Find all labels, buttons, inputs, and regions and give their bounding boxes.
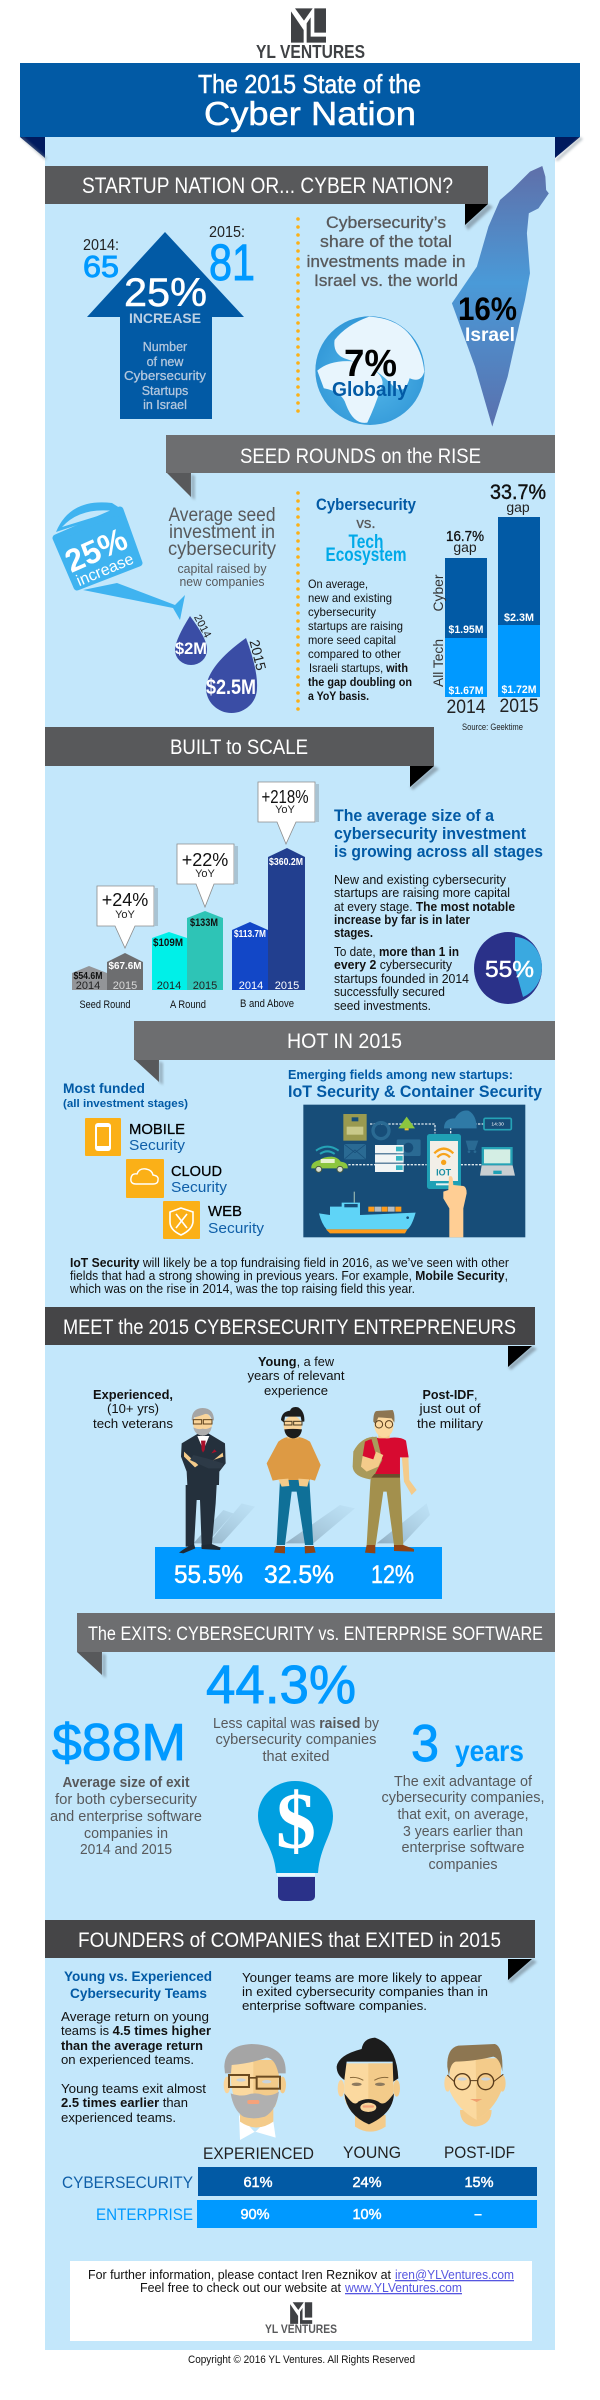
stat: 3 years advantage: enterprise software xyxy=(402,1839,524,1856)
chart: seed round gap bars: 33.7% xyxy=(490,481,546,504)
bars: B and above xyxy=(232,848,305,992)
chart: seed round gap bars: 16.7% xyxy=(446,528,484,545)
stat: 44.3 percent less capital: that exited xyxy=(262,1748,330,1765)
heading: hot in 2015: HOT IN 2015 xyxy=(287,1030,402,1053)
text block: young vs experienced: Cybersecurity Teams xyxy=(70,1985,207,2001)
text block: younger teams: in exited cybersecurity companies than in xyxy=(242,1984,488,1999)
text block: average size growth: New and existing cybersecurity xyxy=(334,872,506,887)
chart: startup count arrow: INCREASE xyxy=(129,310,201,326)
icon: dollar light bulb: $ xyxy=(276,1778,316,1866)
text block: cyber vs tech: compared to other xyxy=(308,647,401,661)
text block: cyber vs tech: Ecosystem xyxy=(326,545,406,566)
chart: seed round gap bars: Cyber xyxy=(430,574,446,612)
chart: startup count arrow: 81 xyxy=(209,234,255,291)
bars: seed round: $54.6M xyxy=(74,971,102,982)
callout: plus 22 percent xyxy=(177,844,238,907)
text block: cybersecurity share: share of the total xyxy=(320,232,452,251)
text: entrepreneur descriptions: (10+ yrs) xyxy=(107,1401,159,1416)
chart: startup count arrow: 2014: xyxy=(83,237,119,254)
bars: A round: $133M xyxy=(190,917,218,929)
callout: plus 24 percent xyxy=(97,886,158,948)
text block: average seed: capital raised by xyxy=(178,561,267,576)
stat: 3 years advantage: 3 years earlier than xyxy=(403,1823,523,1840)
chart: startup count arrow: of new xyxy=(147,355,184,369)
text block: average size growth: increase by far is in later xyxy=(334,912,470,927)
heading: meet the entrepreneurs: MEET the 2015 CYBERSECURITY ENTREPRENEURS xyxy=(63,1316,516,1339)
panel: light blue page background xyxy=(45,137,555,2350)
text block: cyber vs tech: a YoY basis. xyxy=(308,689,369,703)
icon: globe with 7 percent: 7% xyxy=(344,343,397,385)
text: emerging fields xyxy=(288,1067,542,1101)
icon: web shield xyxy=(163,1201,200,1239)
bars: A round xyxy=(152,911,223,992)
bars: A round: 2014 xyxy=(157,980,181,992)
text block: cyber vs tech: cybersecurity xyxy=(308,605,376,619)
table: founder share by type: CYBERSECURITY xyxy=(62,2174,193,2192)
heading: meet the entrepreneurs xyxy=(45,1307,537,1370)
list: most funded security: Most funded xyxy=(63,1080,145,1096)
table: founder share by type: POST-IDF xyxy=(444,2143,515,2162)
callout: plus 22 percent: YoY xyxy=(195,868,216,880)
logo: YL Ventures header xyxy=(256,8,365,62)
table: founder share by type: 90% xyxy=(240,2207,270,2223)
text block: younger teams: enterprise software companies. xyxy=(242,1998,427,2013)
bars: B and above: 2014 xyxy=(239,980,263,992)
text block: cyber vs tech xyxy=(308,495,416,703)
table: founder share by type: 24% xyxy=(352,2175,382,2191)
text block: IoT security paragraph: fields that had a strong showing in previous years. For example, Mobile Security, xyxy=(70,1269,508,1283)
stat: 3 years advantage: 3 xyxy=(411,1715,439,1773)
chart: startup count arrow: 2015: xyxy=(209,224,245,241)
stat: 3 years advantage: that exit, on average, xyxy=(398,1806,528,1823)
heading: founders xyxy=(45,1920,537,1983)
icon: drops 2014 and 2015: $2M xyxy=(175,639,207,658)
text: entrepreneur descriptions: Experienced, xyxy=(93,1387,173,1402)
chart: investment size by stage: A Round xyxy=(170,999,206,1011)
chart: seed round gap bars: $1.72M xyxy=(502,684,536,696)
stat: 44.3 percent less capital xyxy=(206,1655,379,1765)
heading: seed rounds xyxy=(166,435,555,500)
text block: young vs experienced: teams is 4.5 times higher xyxy=(61,2023,211,2038)
title banner: The 2015 State of the xyxy=(198,69,421,99)
callout: plus 24 percent: +24% xyxy=(102,890,148,910)
stat: 3 years advantage: years xyxy=(455,1735,524,1768)
table: founder share by type: ENTERPRISE xyxy=(96,2206,193,2224)
bars: seed round: 2014 xyxy=(76,980,100,992)
text: entrepreneur descriptions: Post-IDF, xyxy=(422,1387,478,1402)
bars: B and above: 2015 xyxy=(275,980,299,992)
list: most funded security: Security xyxy=(129,1137,186,1154)
text block: younger teams xyxy=(242,1970,488,2013)
figure: post IDF man xyxy=(353,1410,417,1553)
text block: young vs experienced: on experienced teams. xyxy=(61,2052,194,2067)
text block: average seed: investment in xyxy=(169,522,275,543)
footer: copyright: Copyright © 2016 YL Ventures. All Rights Reserved xyxy=(188,2354,415,2366)
chart: startup count arrow: in Israel xyxy=(143,398,187,412)
label: 16 percent Israel: Israel xyxy=(465,325,515,346)
logo: YL Ventures footer: YL VENTURES xyxy=(265,2322,337,2336)
text block: cybersecurity share xyxy=(306,213,466,290)
text block: average size growth xyxy=(334,806,543,1013)
bars: A round: 2015 xyxy=(193,980,217,992)
callout: plus 24 percent: YoY xyxy=(115,909,136,921)
shadows xyxy=(193,1503,430,1543)
text block: cyber vs tech: the gap doubling on xyxy=(308,675,412,689)
list: most funded security: Security xyxy=(208,1220,265,1237)
bars: A round: $109M xyxy=(153,937,183,949)
text: entrepreneur descriptions xyxy=(93,1354,484,1431)
text: emerging fields: Emerging fields among new startups: xyxy=(288,1067,513,1082)
icon: dollar light bulb xyxy=(258,1778,333,1901)
text block: cyber vs tech: Israeli startups, with xyxy=(309,661,408,675)
stat: 88M average exit xyxy=(50,1714,202,1858)
heading: built to scale xyxy=(45,727,439,790)
list: most funded security: (all investment stages) xyxy=(63,1098,188,1110)
text block: cyber vs tech: new and existing xyxy=(308,591,392,605)
icon: 25 percent increase tag: increase xyxy=(74,551,136,590)
text block: cybersecurity share: investments made in xyxy=(306,252,466,271)
label: 16 percent Israel xyxy=(458,291,517,346)
stat: 3 years advantage: The exit advantage of xyxy=(394,1773,533,1790)
table: founder share by type: YOUNG xyxy=(343,2143,401,2162)
table: founder share by type xyxy=(62,2143,537,2228)
heading: startup nation xyxy=(45,166,493,230)
figure: platform with percentages: 32.5% xyxy=(264,1561,334,1589)
chart: seed round gap bars xyxy=(430,481,546,732)
logo: YL Ventures header: YL VENTURES xyxy=(256,42,365,62)
bars: seed round: 2015 xyxy=(113,980,137,992)
icon: drops 2014 and 2015: 2015 xyxy=(246,638,270,672)
illustration: internet of things: IOT xyxy=(436,1168,452,1178)
chart: investment size by stage: B and Above xyxy=(240,998,294,1010)
chart: seed round gap bars: $1.95M xyxy=(448,624,484,636)
text block: cyber vs tech: Tech xyxy=(348,532,384,553)
text: entrepreneur descriptions: Young, a few xyxy=(258,1354,335,1369)
chart: seed round gap bars: 2014 xyxy=(446,697,486,718)
face: young xyxy=(337,2038,400,2132)
text block: IoT security paragraph xyxy=(69,1256,509,1296)
text block: cyber vs tech: vs. xyxy=(356,515,376,532)
chart: seed round gap bars: gap xyxy=(453,539,477,555)
stat: 88M average exit: Average size of exit xyxy=(62,1774,190,1791)
icon: drops 2014 and 2015: $2.5M xyxy=(206,676,256,699)
figure: experienced man xyxy=(179,1408,226,1553)
text block: young vs experienced: 2.5 times earlier than xyxy=(61,2095,188,2110)
table: founder share by type: 15% xyxy=(464,2175,494,2191)
text: entrepreneur descriptions: tech veterans xyxy=(93,1416,174,1431)
chart: startup count arrow: Cybersecurity xyxy=(124,369,207,383)
text block: cybersecurity share: Israel vs. the world xyxy=(314,271,458,290)
icon: drops 2014 and 2015: 2014 xyxy=(191,613,213,640)
panel: contact box: www.YLVentures.com xyxy=(344,2280,462,2295)
text: entrepreneur descriptions: years of relevant xyxy=(248,1368,345,1383)
text block: young vs experienced xyxy=(61,1968,212,2125)
icon: 25 percent increase tag xyxy=(56,502,185,620)
text block: average size growth: To date, more than 1 in xyxy=(334,944,459,959)
text block: cyber vs tech: On average, xyxy=(308,577,368,591)
text block: cyber vs tech: more seed capital xyxy=(308,633,396,647)
text block: average size growth: The average size of a xyxy=(334,806,495,825)
text block: cybersecurity share: Cybersecurity’s xyxy=(326,213,446,232)
figure: platform with percentages: 55.5% xyxy=(174,1561,243,1589)
text block: average size growth: startups founded in 2014 xyxy=(334,971,469,986)
icon: globe with 7 percent xyxy=(315,316,425,425)
chart: seed round gap bars: All Tech xyxy=(430,639,446,687)
chart: seed round gap bars: Source: Geektime xyxy=(462,722,523,732)
text block: average seed: Average seed xyxy=(168,505,276,526)
illustration: founder faces xyxy=(224,2038,506,2140)
logo: YL Ventures footer xyxy=(265,2302,337,2336)
text block: younger teams: Younger teams are more likely to appear xyxy=(242,1970,483,1985)
list: most funded security xyxy=(63,1080,265,1239)
stat: 88M average exit: 2014 and 2015 xyxy=(80,1841,172,1858)
chart: startup count arrow: Number xyxy=(143,340,187,354)
chart: seed round gap bars: $2.3M xyxy=(504,612,534,624)
text block: average size growth: is growing across all stages xyxy=(334,842,543,861)
text block: young vs experienced: than the average return xyxy=(61,2038,203,2053)
text block: cyber vs tech: startups are raising xyxy=(308,619,403,633)
table: founder share by type: 10% xyxy=(352,2207,382,2223)
text block: young vs experienced: Young vs. Experienced xyxy=(64,1968,212,1984)
bars: seed round xyxy=(72,953,143,992)
text block: young vs experienced: Average return on young xyxy=(61,2009,209,2024)
heading: built to scale: BUILT to SCALE xyxy=(170,736,308,759)
list: most funded security: CLOUD xyxy=(171,1163,222,1180)
table: founder share by type: EXPERIENCED xyxy=(203,2144,314,2163)
table: founder share by type: – xyxy=(474,2207,482,2223)
icon: cloud xyxy=(126,1159,164,1198)
heading: hot in 2015 xyxy=(134,1021,555,1085)
panel: contact box xyxy=(70,2261,532,2341)
chart: investment size by stage: Seed Round xyxy=(80,999,130,1011)
stat: 44.3 percent less capital: cybersecurity companies xyxy=(216,1731,376,1748)
chart: seed round gap bars: $1.67M xyxy=(448,685,484,697)
icon: 25 percent increase tag: 25% xyxy=(59,521,133,579)
illustration: internet of things xyxy=(303,1105,525,1237)
callout: plus 218 percent: YoY xyxy=(275,804,296,816)
icon: mobile xyxy=(85,1118,121,1156)
list: most funded security: Security xyxy=(171,1179,228,1196)
chart: startup count arrow xyxy=(83,224,255,419)
table: founder share by type: 61% xyxy=(243,2175,273,2191)
chart: startup count arrow: 25% xyxy=(124,271,207,315)
panel: contact box: Feel free to check out our website at xyxy=(140,2280,341,2295)
text block: average size growth: at every stage. The most notable xyxy=(334,899,515,914)
text: emerging fields: IoT Security & Container Security xyxy=(288,1082,542,1101)
callout: plus 218 percent xyxy=(258,782,319,844)
text block: average seed: new companies xyxy=(180,574,265,589)
chart: investment size by stage xyxy=(72,782,319,1011)
stat: 44.3 percent less capital: 44.3% xyxy=(206,1655,356,1715)
panel: contact box: iren@YLVentures.com xyxy=(395,2267,514,2282)
heading: founders: FOUNDERS of COMPANIES that EXITED in 2015 xyxy=(78,1929,501,1952)
illustration: internet of things: 14:30 xyxy=(491,1122,504,1128)
stat: 3 years advantage: cybersecurity companies, xyxy=(382,1789,544,1806)
text block: average size growth: startups are raising more capital xyxy=(334,885,510,900)
text block: average seed xyxy=(168,505,276,589)
text: entrepreneur descriptions: experience xyxy=(264,1383,328,1398)
stat: 88M average exit: companies in xyxy=(84,1825,168,1842)
face: experienced xyxy=(224,2044,286,2140)
chart: seed round gap bars: gap xyxy=(506,499,530,515)
text block: average size growth: stages. xyxy=(334,925,373,940)
icon: map of Israel xyxy=(452,166,549,427)
bars: seed round: $67.6M xyxy=(108,961,142,972)
label: 16 percent Israel: 16% xyxy=(458,291,517,327)
list: most funded security: MOBILE xyxy=(129,1121,185,1138)
text block: average seed: cybersecurity xyxy=(168,539,276,560)
heading: the exits xyxy=(77,1613,555,1678)
chart: startup count arrow: 65 xyxy=(83,249,119,284)
title banner xyxy=(20,63,583,161)
text: entrepreneur descriptions: the military xyxy=(417,1416,484,1431)
title banner: Cyber Nation xyxy=(204,95,416,132)
stat: 3 years advantage: companies xyxy=(428,1856,498,1873)
list: most funded security: WEB xyxy=(208,1203,242,1220)
figure: platform with percentages xyxy=(155,1547,442,1599)
chart: 55 percent pie xyxy=(474,932,542,1004)
bars: B and above: $360.2M xyxy=(269,857,303,868)
text block: young vs experienced: experienced teams. xyxy=(61,2110,176,2125)
stat: 88M average exit: for both cybersecurity xyxy=(55,1791,197,1808)
chart: 55 percent pie: 55% xyxy=(485,956,534,982)
callout: plus 22 percent: +22% xyxy=(182,850,228,870)
bars: B and above: $113.7M xyxy=(234,929,266,940)
stat: 88M average exit: $88M xyxy=(52,1714,186,1772)
stat: 88M average exit: and enterprise software xyxy=(50,1808,202,1825)
figure: platform with percentages: 12% xyxy=(371,1561,414,1589)
chart: startup count arrow: Startups xyxy=(142,384,188,398)
text block: IoT security paragraph: IoT Security will likely be a top fundraising field in 2016, as we’ve seen with other xyxy=(70,1256,509,1270)
icon: drops 2014 and 2015 xyxy=(175,613,270,713)
callout: plus 218 percent: +218% xyxy=(262,787,308,807)
text block: average size growth: seed investments. xyxy=(334,998,431,1013)
text: entrepreneur descriptions: just out of xyxy=(418,1401,481,1416)
text block: average size growth: cybersecurity investment xyxy=(334,824,526,843)
text block: IoT security paragraph: which was on the rise in 2014, was the top raising field this year. xyxy=(69,1282,415,1296)
figure: young man xyxy=(267,1407,321,1553)
illustration: three entrepreneurs xyxy=(179,1407,430,1553)
heading: seed rounds: SEED ROUNDS on the RISE xyxy=(240,445,481,468)
text block: average size growth: successfully secured xyxy=(334,984,445,999)
text block: average size growth: every 2 cybersecurity xyxy=(334,957,452,972)
text block: young vs experienced: Young teams exit almost xyxy=(61,2081,206,2096)
panel: contact box: For further information, please contact Iren Reznikov at xyxy=(88,2267,391,2282)
face: post IDF xyxy=(444,2044,506,2127)
icon: globe with 7 percent: Globally xyxy=(332,379,409,401)
chart: seed round gap bars: 2015 xyxy=(500,696,538,717)
heading: startup nation: STARTUP NATION OR... CYBER NATION? xyxy=(82,173,453,198)
stat: 44.3 percent less capital: Less capital was raised by xyxy=(213,1715,379,1732)
stat: 3 years advantage xyxy=(382,1715,544,1873)
text block: cyber vs tech: Cybersecurity xyxy=(316,495,416,514)
